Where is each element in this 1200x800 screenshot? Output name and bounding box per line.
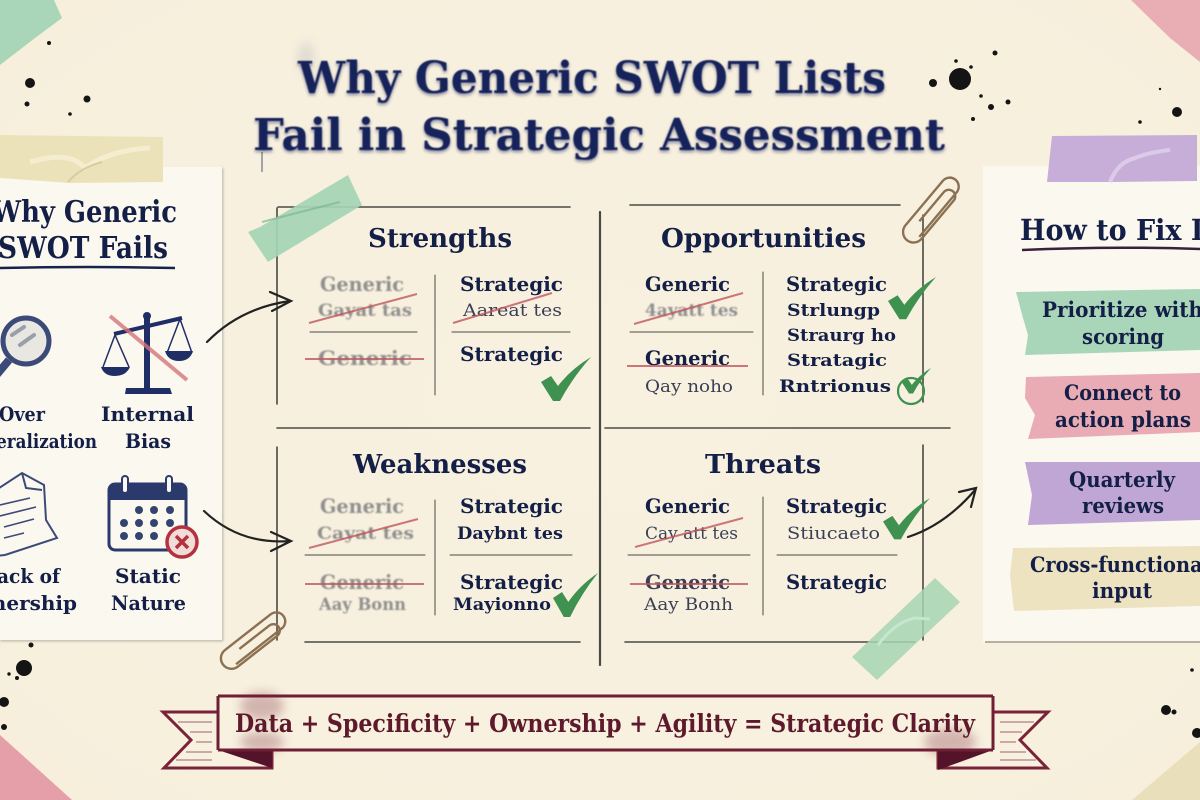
arrow: calendar to weaknesses — [204, 511, 291, 551]
fix: connect to action plans — [1025, 373, 1200, 439]
fix: quarterly reviews: reviews — [1082, 493, 1164, 518]
quadrant: strengths: Generic — [318, 346, 412, 370]
quadrant: weaknesses: Strategic — [460, 570, 563, 594]
quadrant: strengths: Strategic — [460, 342, 563, 366]
label: static nature — [111, 564, 186, 615]
label: static nature: Static — [115, 564, 181, 588]
tape: green top-left of grid — [248, 175, 362, 262]
quadrant: strengths: Strengths — [368, 224, 512, 254]
label: internal bias: Internal — [101, 402, 194, 426]
quadrant: threats: Strategic — [786, 494, 887, 518]
fix: prioritize with scoring — [1016, 289, 1200, 355]
title — [253, 42, 946, 172]
fix: prioritize with scoring: scoring — [1082, 324, 1164, 349]
quadrant: opportunities: Generic — [645, 272, 730, 296]
quadrant: weaknesses: Generic — [320, 494, 404, 518]
tape: green bottom-right of grid — [852, 578, 960, 680]
quadrant: weaknesses: Aay Bonn — [318, 595, 406, 615]
quadrant: threats: Strategic — [786, 570, 887, 594]
quadrant: strengths — [305, 224, 591, 401]
quadrant: opportunities — [627, 224, 936, 404]
quadrant: opportunities: Rntrionus — [779, 377, 891, 397]
quadrant: opportunities: Strlungp — [787, 301, 880, 321]
title: Why Generic SWOT Lists — [297, 53, 886, 104]
arrow: scales to strengths — [207, 292, 291, 342]
banner: strategic clarity formula: Data + Specificity + Ownership + Agility = Strategic Clarity — [235, 709, 976, 738]
quadrant: weaknesses: Daybnt tes — [457, 524, 563, 544]
label: internal bias — [101, 402, 194, 453]
quadrant: opportunities: Generic — [645, 346, 730, 370]
quadrant: opportunities: 4ayatt tes — [645, 301, 738, 321]
quadrant: threats: Cay att tes — [645, 524, 738, 544]
icon: magnifying glass — [0, 318, 49, 378]
SWOT grid frame — [277, 205, 950, 665]
arrow: threats to fixes — [908, 488, 976, 537]
quadrant: weaknesses — [305, 450, 598, 617]
fix: connect to action plans: action plans — [1055, 407, 1191, 432]
fix: quarterly reviews — [1025, 462, 1200, 525]
quadrant: threats: Threats — [705, 450, 821, 480]
panel: why generic SWOT fails — [0, 135, 222, 640]
label: over generalization: Over — [0, 402, 45, 426]
quadrant: opportunities: Strategic — [786, 272, 887, 296]
quadrant: weaknesses: Strategic — [460, 494, 563, 518]
quadrant: threats: Stiucaeto — [787, 524, 880, 544]
quadrant: strengths: Gayat tas — [318, 301, 412, 321]
fix: cross-functional input: input — [1092, 578, 1152, 603]
label: static nature: Nature — [111, 591, 186, 615]
fix: quarterly reviews: Quarterly — [1069, 467, 1176, 492]
title: Fail in Strategic Assessment — [253, 110, 946, 161]
quadrant: weaknesses: Weaknesses — [352, 450, 527, 480]
banner: strategic clarity formula — [163, 692, 1048, 770]
panel heading — [0, 195, 177, 268]
quadrant: weaknesses: Cayat tes — [317, 524, 414, 544]
icon: scales with red strike — [101, 312, 193, 394]
label: lack of ownership — [0, 564, 77, 615]
quadrant: opportunities: Straurg ho — [787, 326, 896, 346]
fix: cross-functional input — [1010, 546, 1200, 611]
icon: calendar with red x — [109, 476, 197, 557]
quadrant: threats: Generic — [645, 570, 730, 594]
quadrant: threats — [628, 450, 930, 615]
quadrant: strengths: Strategic — [460, 272, 563, 296]
quadrant: weaknesses: Mayionno — [453, 595, 551, 615]
quadrant: strengths: Generic — [320, 272, 404, 296]
quadrant: threats: Generic — [645, 494, 730, 518]
label: internal bias: Bias — [125, 429, 171, 453]
icon: document — [0, 473, 57, 556]
panel: how to fix it — [983, 135, 1200, 642]
quadrant: weaknesses: Generic — [320, 570, 404, 594]
label: over generalization — [0, 402, 97, 453]
quadrant: opportunities: Stratagic — [787, 351, 887, 371]
quadrant: opportunities: Opportunities — [661, 224, 866, 254]
paperclip: top right — [899, 174, 965, 247]
fix: connect to action plans: Connect to — [1064, 380, 1181, 405]
quadrant: threats: Aay Bonh — [643, 595, 733, 615]
paperclip: bottom left — [217, 609, 291, 673]
panel heading: SWOT Fails — [0, 231, 168, 266]
quadrant: opportunities: Qay noho — [645, 377, 733, 397]
quadrant: strengths: Aareat tes — [462, 301, 562, 321]
